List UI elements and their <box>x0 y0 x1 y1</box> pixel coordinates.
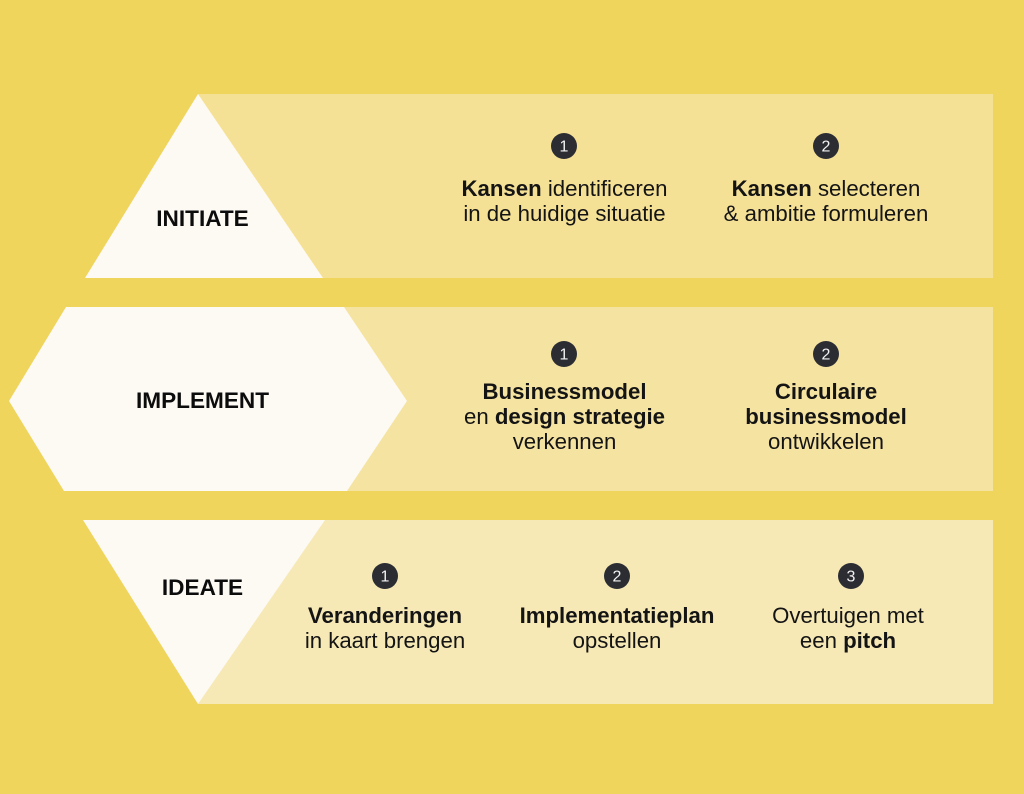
step: implementatieplan: opstellen <box>573 628 661 653</box>
step: circulaire businessmodel: businessmodel <box>745 404 907 429</box>
step: veranderingen: 1 <box>381 568 390 586</box>
step: businessmodel verkennen: en design strategie <box>464 404 665 429</box>
panel: ideate <box>83 520 993 704</box>
step: kansen selecteren <box>724 133 928 226</box>
panel: implement <box>9 307 993 491</box>
heading: INITIATE: INITIATE <box>156 206 249 231</box>
step: kansen identificeren <box>462 133 667 226</box>
step: overtuigen: 3 <box>847 568 856 586</box>
heading: IMPLEMENT: IMPLEMENT <box>136 388 269 413</box>
shape: ideate inverted triangle <box>83 520 325 704</box>
step: businessmodel verkennen <box>464 341 665 454</box>
step: circulaire businessmodel: 2 <box>822 346 831 364</box>
step: implementatieplan <box>520 563 714 653</box>
step: circulaire businessmodel <box>745 341 907 454</box>
band: ideate background <box>198 520 993 704</box>
step: kansen selecteren: 2 <box>822 138 831 156</box>
step: kansen selecteren: & ambitie formuleren <box>724 201 928 226</box>
step: overtuigen: Overtuigen met <box>772 603 924 628</box>
shape: initiate triangle <box>85 94 323 278</box>
step: businessmodel verkennen: verkennen <box>513 429 616 454</box>
step: overtuigen <box>772 563 924 653</box>
step: businessmodel verkennen: 1 <box>560 346 569 364</box>
step: implementatieplan: 2 <box>613 568 622 586</box>
step: veranderingen <box>305 563 465 653</box>
step: circulaire businessmodel: ontwikkelen <box>768 429 884 454</box>
step: overtuigen: een pitch <box>800 628 896 653</box>
band: implement background <box>300 307 993 491</box>
step: kansen identificeren: in de huidige situatie <box>463 201 666 226</box>
band: initiate background <box>198 94 993 278</box>
step: kansen identificeren: Kansen identificeren <box>462 176 667 201</box>
panel: initiate <box>85 94 993 278</box>
heading: IDEATE: IDEATE <box>162 575 243 600</box>
step: kansen selecteren: Kansen selecteren <box>732 176 920 201</box>
step: veranderingen: Veranderingen <box>308 603 462 628</box>
step: implementatieplan: Implementatieplan <box>520 603 714 628</box>
step: kansen identificeren: 1 <box>560 138 569 156</box>
shape: implement hexagon <box>9 307 407 491</box>
step: veranderingen: in kaart brengen <box>305 628 465 653</box>
step: businessmodel verkennen: Businessmodel <box>482 379 646 404</box>
step: circulaire businessmodel: Circulaire <box>775 379 877 404</box>
